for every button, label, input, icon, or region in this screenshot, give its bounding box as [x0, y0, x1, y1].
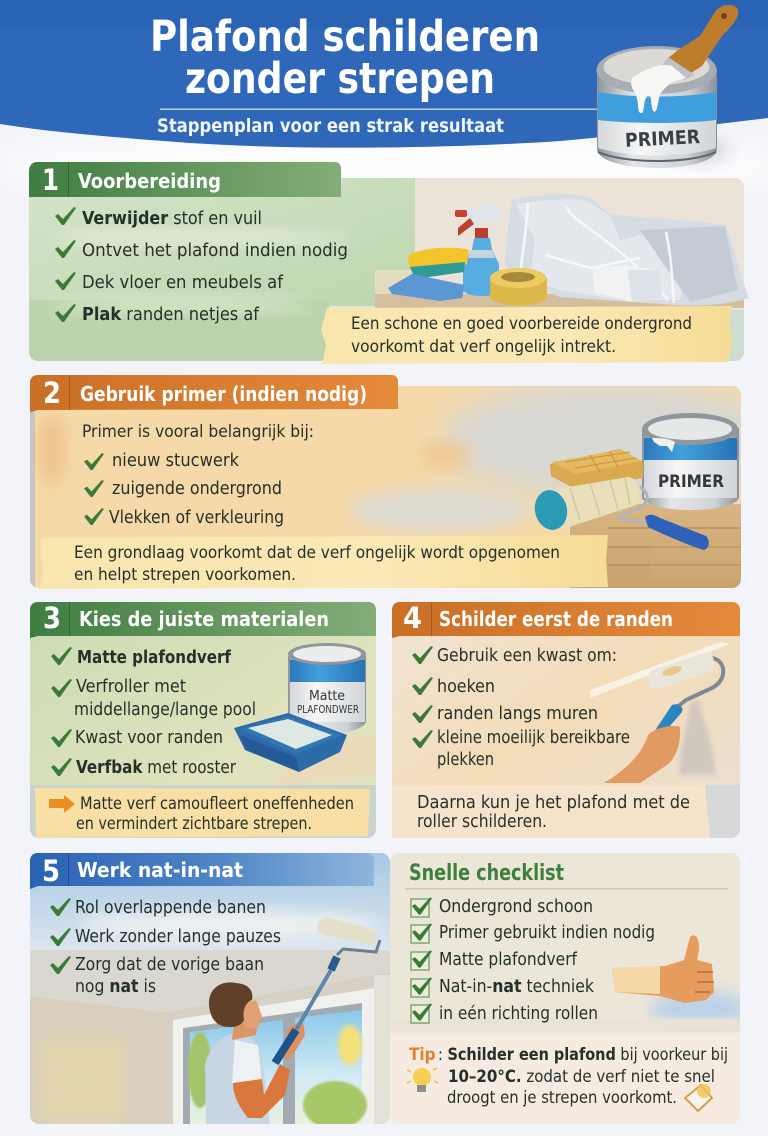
- subtitle: Stappenplan voor een strak resultaat: [157, 115, 504, 137]
- panel: step 4 randen: [392, 601, 740, 838]
- tab heading: 5 Werk nat-in-nat: 5: [42, 854, 60, 888]
- panel: step 1 voorbereiding: [29, 162, 749, 364]
- callout step 3: en vermindert zichtbare strepen.: [76, 814, 312, 833]
- checklist step 2: nieuw stucwerk: [112, 450, 240, 471]
- panel background step 4: [392, 636, 740, 838]
- illustration: covered furniture: [505, 194, 749, 305]
- checklist step 1: [55, 207, 348, 325]
- icon: matte paint can: Matte: [309, 689, 345, 704]
- checklist step 3: Kwast voor randen: [75, 727, 223, 748]
- icon: sponges: [388, 248, 469, 301]
- callout step 3: [35, 788, 370, 838]
- callout step 2: en helpt strepen voorkomen.: [74, 565, 296, 584]
- checklist step 1: Dek vloer en meubels af: [82, 272, 284, 293]
- callout step 1: voorkomt dat verf ongelijk intrekt.: [351, 337, 616, 356]
- checklist items: Primer gebruikt indien nodig: [439, 922, 655, 943]
- tab heading: 1 Voorbereiding: 1: [42, 163, 59, 197]
- checklist step 4: kleine moeilijk bereikbare: [437, 727, 630, 748]
- checklist step 3: [51, 647, 256, 778]
- tab heading: 1 Voorbereiding: [29, 162, 341, 197]
- tab heading: 2 Gebruik primer: [30, 375, 398, 412]
- tip text: [409, 1045, 728, 1107]
- panel: step 3 materialen: [30, 601, 376, 838]
- title: [150, 12, 540, 104]
- header banner: [0, 0, 768, 148]
- icon: paint tray: [234, 713, 347, 772]
- tab heading: 4 Schilder eerst de randen: 4: [403, 601, 422, 635]
- callout step 2: Een grondlaag voorkomt dat de verf ongelijk wordt opgenomen: [74, 543, 560, 562]
- checklist items: in eén richting rollen: [439, 1003, 598, 1024]
- tip text: Tip: [409, 1045, 436, 1065]
- checklist step 4: hoeken: [437, 676, 495, 697]
- panel background checklist: [390, 853, 750, 1124]
- panel background step 3: [30, 636, 376, 838]
- checklist step 4: randen langs muren: [437, 703, 598, 724]
- tip text: : Schilder een plafond bij voorkeur bij: [438, 1045, 728, 1064]
- tab heading: 3 Kies de juiste materialen: [30, 601, 376, 638]
- tab heading: 5 Werk nat-in-nat: [30, 853, 374, 889]
- checklist step 5: [50, 897, 281, 997]
- tab heading: 4 Schilder eerst de randen: Schilder eerst de randen: [439, 607, 673, 631]
- tip text: droogt en je strepen voorkomt.: [447, 1088, 677, 1107]
- title: Plafond schilderen: [150, 12, 540, 62]
- illustration: roller in hand: [604, 652, 723, 783]
- icon: spray bottle: [455, 203, 503, 296]
- title: zonder strepen: [185, 54, 495, 104]
- panel: snelle checklist: [390, 853, 750, 1124]
- checklist step 2: [82, 422, 314, 528]
- icon: arrow: [49, 795, 75, 813]
- checklist step 5: Rol overlappende banen: [75, 897, 266, 918]
- panel background step 1: [29, 178, 744, 361]
- tab heading: 3 Kies de juiste materialen: 3: [43, 601, 61, 635]
- checklist step 4: [412, 645, 630, 770]
- checklist step 4: Gebruik een kwast om:: [437, 645, 617, 666]
- icon: paint swatch: [685, 1084, 712, 1111]
- checklist items: [411, 896, 655, 1024]
- panel background step 2: [30, 380, 768, 588]
- checklist step 3: Matte plafondverf: [77, 647, 232, 668]
- icon: light bulb: [407, 1068, 438, 1092]
- checklist items: Nat-in-nat techniek: [439, 976, 595, 997]
- icon: primer can: PRIMER: [658, 472, 724, 492]
- checklist step 1: Ontvet het plafond indien nodig: [82, 240, 348, 261]
- icon: matte paint can: [288, 643, 366, 734]
- tab heading: 1 Voorbereiding: Voorbereiding: [78, 169, 221, 193]
- checklist heading: Snelle checklist: [409, 861, 564, 886]
- checklist step 2: Primer is vooral belangrijk bij:: [82, 422, 314, 441]
- icon: matte paint can: PLAFONDWER: [297, 704, 359, 716]
- icon: primer paint can with brush: PRIMER: [625, 126, 701, 152]
- checklist step 2: Vlekken of verkleuring: [109, 507, 284, 528]
- callout step 3: Matte verf camoufleert oneffenheden: [80, 794, 354, 813]
- icon: paint roller: [531, 477, 709, 550]
- panel: step 2 primer: [30, 375, 768, 589]
- callout step 4: [392, 785, 710, 838]
- callout step 1: Een schone en goed voorbereide ondergrond: [351, 314, 692, 333]
- checklist step 1: Plak randen netjes af: [82, 304, 260, 325]
- illustration: painter: [205, 982, 305, 1124]
- icon: primer paint can with brush: [596, 5, 738, 168]
- checklist step 2: zuigende ondergrond: [112, 478, 282, 499]
- checklist step 1: Verwijder stof en vuil: [82, 208, 262, 229]
- checklist step 3: Verfbak met rooster: [76, 757, 236, 778]
- tip text: 10–20°C. zodat de verf niet te snel: [448, 1067, 715, 1086]
- tab heading: 3 Kies de juiste materialen: Kies de juiste materialen: [79, 607, 329, 631]
- icon: sanding block: [550, 449, 643, 489]
- tab heading: 2 Gebruik primer: Gebruik primer (indien nodig): [80, 382, 367, 406]
- checklist step 5: nog nat is: [75, 976, 156, 997]
- icon: masking tape: [490, 268, 547, 306]
- callout step 2: [40, 535, 608, 589]
- checklist step 3: Verfroller met: [76, 676, 186, 697]
- tab heading: 4 Schilder eerst de randen: [392, 601, 740, 638]
- checklist step 4: plekken: [437, 749, 494, 770]
- checklist items: Ondergrond schoon: [439, 896, 593, 917]
- icon: thumbs up: [612, 935, 714, 1003]
- callout step 4: roller schilderen.: [417, 811, 547, 832]
- illustration: long roller pole: [275, 918, 380, 1063]
- tab heading: 2 Gebruik primer: 2: [43, 376, 61, 410]
- callout step 1: [321, 306, 732, 364]
- room scene: [30, 853, 390, 1129]
- checklist step 3: middellange/lange pool: [74, 699, 256, 720]
- tab heading: 5 Werk nat-in-nat: Werk nat-in-nat: [77, 858, 243, 882]
- checklist step 5: Zorg dat de vorige baan: [75, 954, 264, 975]
- checklist items: Matte plafondverf: [439, 949, 578, 970]
- icon: primer can: [642, 413, 739, 510]
- checklist step 5: Werk zonder lange pauzes: [75, 926, 281, 947]
- panel: step 5 nat-in-nat: [30, 853, 390, 1129]
- callout step 4: Daarna kun je het plafond met de: [417, 792, 690, 813]
